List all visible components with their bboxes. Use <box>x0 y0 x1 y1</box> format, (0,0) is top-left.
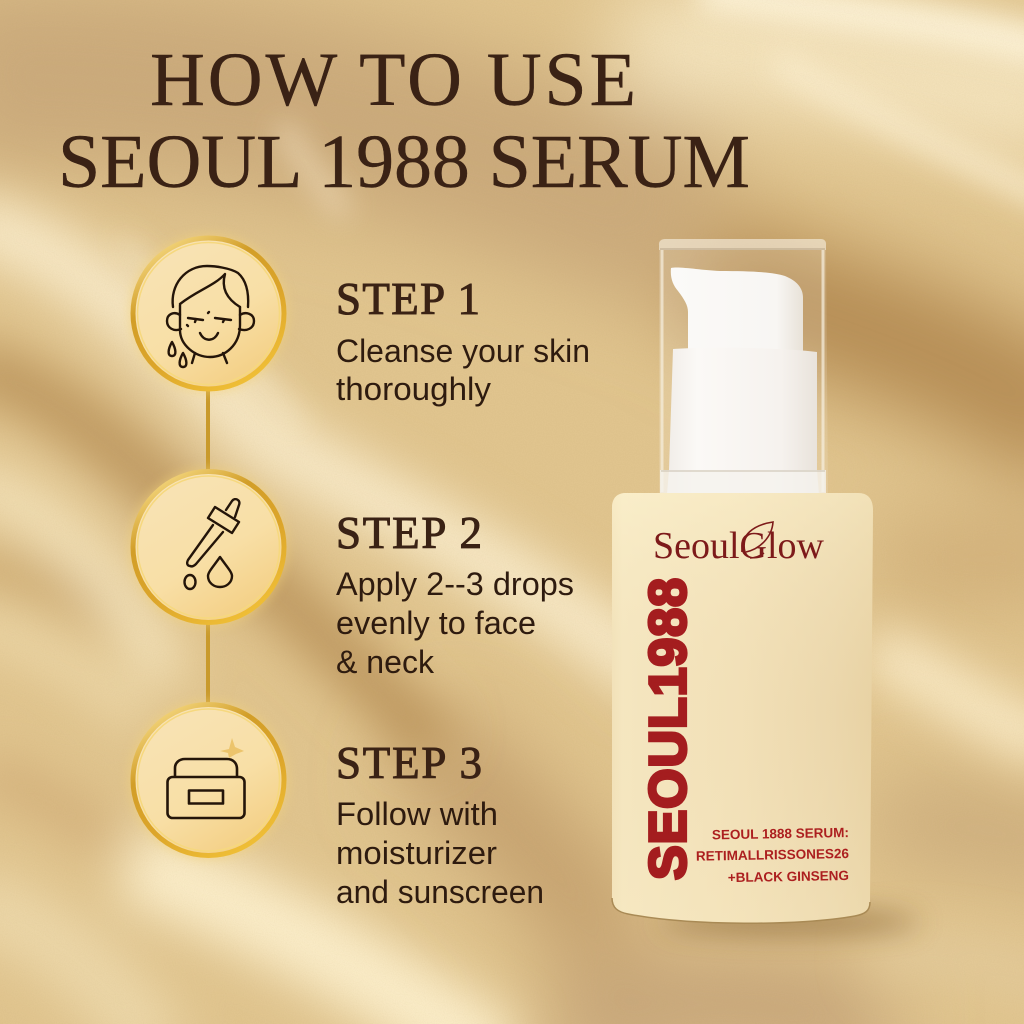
vertical product name: SEOUL1988 <box>640 578 698 880</box>
serum bottle <box>612 239 873 923</box>
icon: face cleansing <box>128 234 288 394</box>
connector: step 1 to 2 <box>206 390 210 470</box>
step 3 text <box>336 738 544 910</box>
step 3 text: and sunscreen <box>336 874 544 910</box>
bottle pump head <box>671 267 803 352</box>
product description: RETIMALLRISSONES26 <box>696 846 850 864</box>
step 2 text <box>336 508 574 680</box>
step 1 text: thoroughly <box>336 371 491 407</box>
step 3 text: Follow with <box>336 796 498 832</box>
step 3 text: STEP 3 <box>336 738 482 788</box>
icon: dropper <box>128 467 288 627</box>
step 1 text <box>336 274 590 407</box>
bottle clear lid <box>659 239 828 494</box>
step 2 text: & neck <box>336 644 435 680</box>
bottle lid highlights <box>659 239 826 493</box>
connector: step 2 to 3 <box>206 623 210 703</box>
step 1 text: STEP 1 <box>336 274 480 324</box>
bottle pump collar <box>667 348 819 494</box>
title: HOW TO USE <box>150 38 636 122</box>
step 2 text: STEP 2 <box>336 508 482 558</box>
product description <box>696 825 850 885</box>
brand logo: SeoulGlow <box>653 525 825 567</box>
dark folds <box>0 365 440 750</box>
step 2 text: evenly to face <box>336 605 536 641</box>
floor shadow <box>660 910 920 934</box>
title <box>58 38 750 204</box>
product description: SEOUL 1888 SERUM: <box>712 825 849 842</box>
bright folds <box>0 220 660 680</box>
step 1 text: Cleanse your skin <box>336 333 590 369</box>
product description: +BLACK GINSENG <box>728 868 849 885</box>
title: SEOUL 1988 SERUM <box>58 120 750 204</box>
step 2 text: Apply 2--3 drops <box>336 566 574 602</box>
bottle body <box>612 493 873 923</box>
step 3 text: moisturizer <box>336 835 497 871</box>
icon: cream jar <box>128 700 288 860</box>
